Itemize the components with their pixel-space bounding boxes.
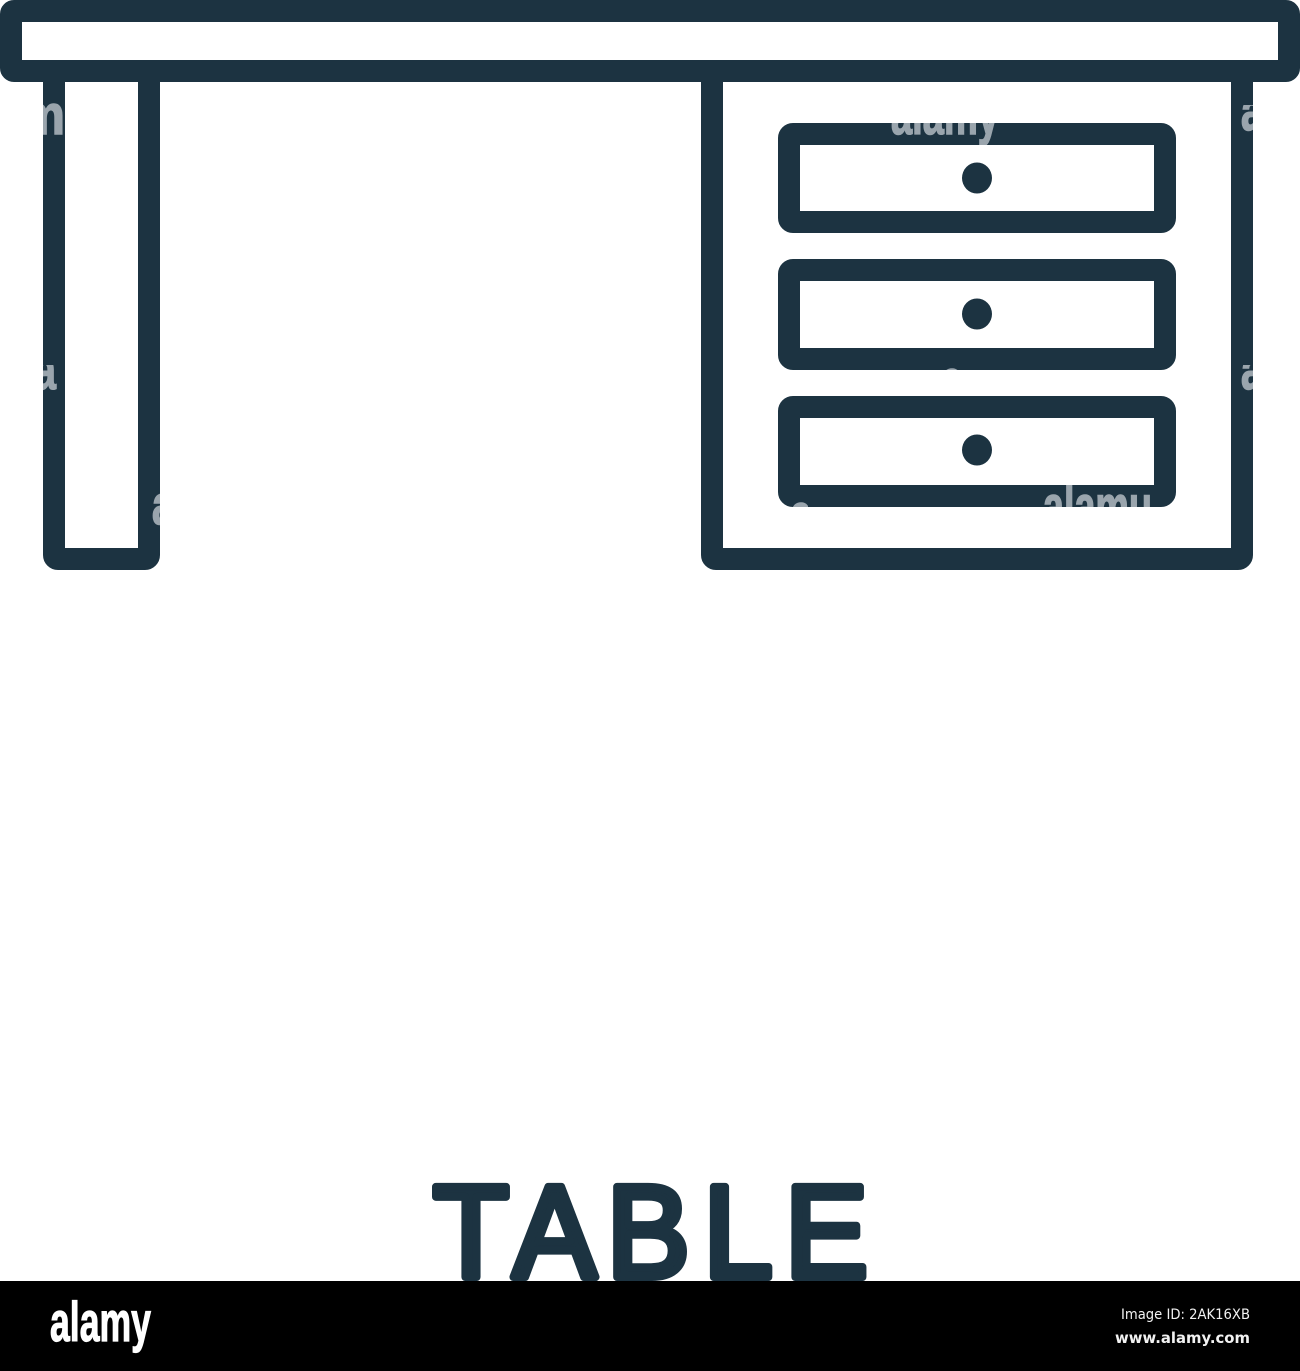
watermark fragments: a — [1241, 338, 1264, 401]
top drawer — [789, 134, 1165, 222]
top drawer knob — [962, 162, 992, 194]
desk left leg — [54, 71, 149, 559]
bottom drawer knob — [962, 434, 992, 466]
footer logo: alamy — [50, 1290, 151, 1353]
image id: Image ID: 2AK16XB — [1121, 1307, 1250, 1323]
watermark fragments: a — [790, 482, 813, 545]
watermark fragments — [43, 103, 1253, 526]
watermark fragments: alamu — [1043, 474, 1152, 537]
desk top — [11, 11, 1289, 71]
footer bar — [0, 1281, 1300, 1371]
watermark fragments: a — [1241, 79, 1264, 142]
watermark fragments: a — [34, 338, 57, 401]
watermark fragments: a — [941, 348, 964, 411]
watermark fragments: alamy — [891, 83, 999, 146]
bottom drawer — [789, 407, 1165, 496]
website: www.alamy.com — [1115, 1329, 1250, 1347]
title: TABLE — [433, 1159, 868, 1306]
watermark fragments: a — [152, 473, 175, 536]
middle drawer — [789, 270, 1165, 359]
middle drawer knob — [962, 298, 992, 330]
watermark fragments: m — [20, 83, 65, 146]
desk drawer cabinet — [712, 71, 1242, 559]
icon: desk — [11, 11, 1289, 559]
